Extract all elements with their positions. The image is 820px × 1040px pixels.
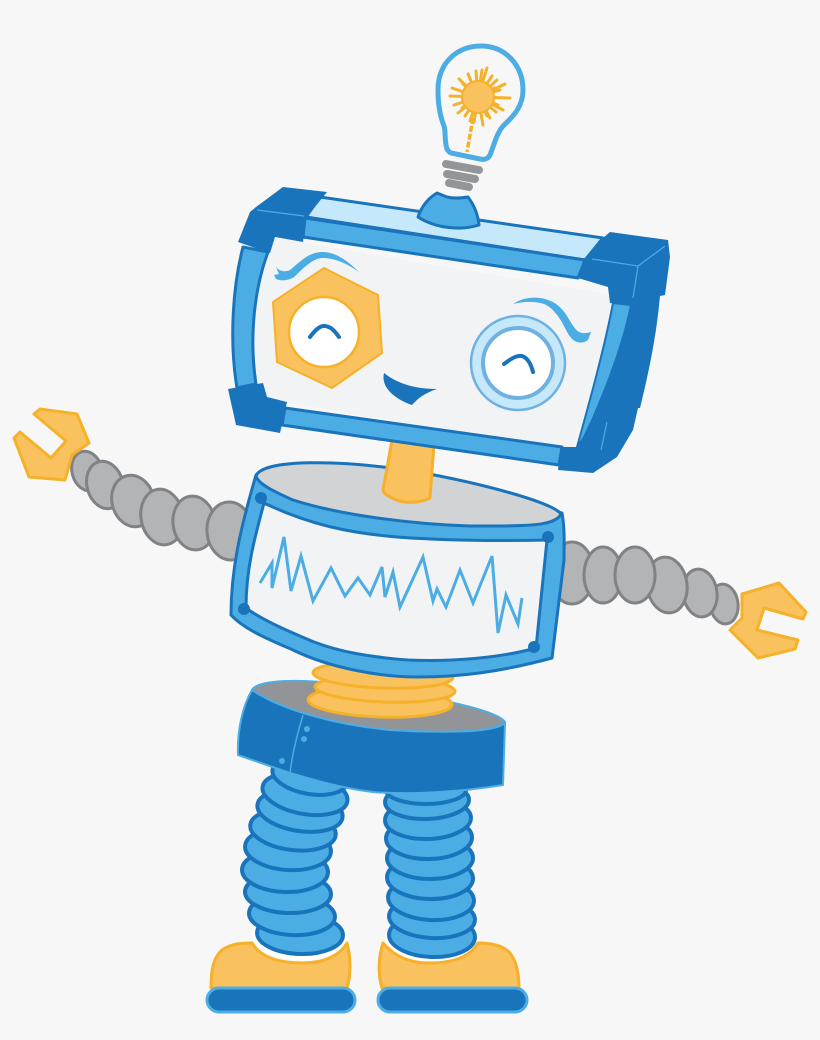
bottom band [282, 408, 562, 465]
bottom-left corner [228, 383, 287, 433]
torso [231, 463, 564, 677]
left wrench hand [14, 409, 89, 480]
top band [303, 218, 585, 278]
waist spring [308, 660, 455, 720]
top-left corner [238, 187, 327, 253]
right band [577, 303, 631, 447]
left shoe [207, 943, 355, 1012]
antenna dome [418, 193, 479, 228]
right shoe [378, 943, 527, 1012]
face screen [252, 236, 612, 452]
waveform [260, 537, 522, 633]
right wrench hand [730, 583, 806, 658]
neck [383, 440, 434, 502]
hips [238, 681, 505, 793]
right leg [384, 776, 477, 960]
torso screen [246, 503, 547, 660]
right eye: lens [471, 316, 565, 410]
left arm [67, 448, 255, 562]
mouth [383, 373, 437, 405]
left band [233, 247, 268, 388]
right corners and side [558, 232, 670, 473]
right arm [550, 542, 741, 626]
top light face [306, 197, 603, 260]
right eyebrow [513, 298, 591, 343]
left eye: hex nut [273, 268, 382, 388]
left eyebrow [274, 252, 359, 280]
left leg [241, 752, 351, 960]
icon: light bulb [438, 46, 523, 187]
head [228, 187, 670, 473]
